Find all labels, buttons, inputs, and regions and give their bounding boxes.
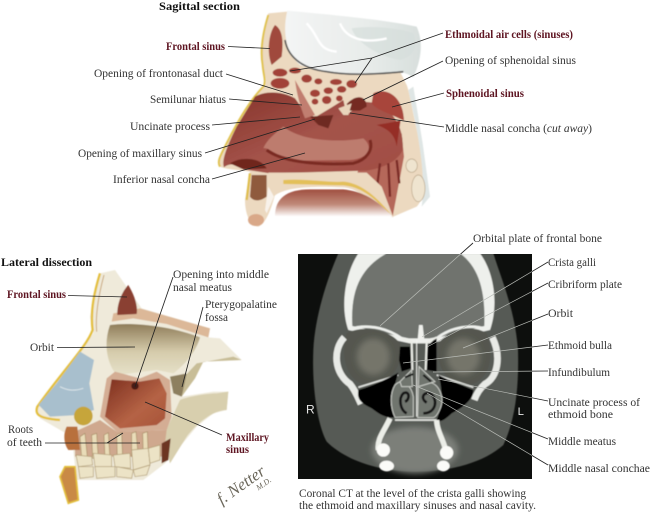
CT label: uncinate process of ethmoid bone: ethmoid bone: [548, 409, 613, 421]
CT label: middle nasal conchae: Middle nasal conchae: [548, 463, 650, 475]
heading: sagittal section: Sagittal section: [159, 1, 241, 13]
leader lines beyond the CT image: [380, 243, 548, 465]
CT label: uncinate process of ethmoid bone: Uncinate process of: [548, 397, 640, 409]
label: pterygopalatine fossa: fossa: [205, 312, 228, 324]
label: sphenoidal sinus: [392, 88, 524, 107]
heading: lateral dissection: Lateral dissection: [1, 257, 93, 269]
label: frontal sinus, sagittal: [166, 41, 270, 53]
label: opening of sphenoidal sinus: Opening of sphenoidal sinus: [445, 55, 577, 67]
CT label: middle meatus: Middle meatus: [548, 436, 617, 448]
label: pterygopalatine fossa: [182, 299, 277, 387]
CT label: cribriform plate: Cribriform plate: [548, 279, 622, 291]
label: semilunar hiatus: [150, 94, 302, 106]
label: middle nasal concha: Middle nasal concha (cut away): [445, 123, 592, 135]
L marker: L: [518, 406, 524, 418]
label: roots of teeth: of teeth: [7, 437, 42, 449]
label: uncinate process: [130, 117, 300, 133]
label: opening into middle nasal meatus: Opening into middle: [173, 269, 269, 281]
label: inferior nasal concha: Inferior nasal concha: [113, 174, 210, 186]
label: opening into middle nasal meatus: nasal meatus: [173, 282, 233, 294]
signature: f. Netter: [213, 461, 269, 508]
label: opening of maxillary sinus: Opening of maxillary sinus: [78, 148, 203, 160]
R marker: R: [306, 403, 315, 417]
illustration: lateral dissection of skull: [37, 270, 273, 512]
label: opening into middle nasal meatus: [135, 269, 269, 387]
caption: CT description: Coronal CT at the level of the crista galli showing: [299, 488, 526, 500]
label: frontal sinus, lateral: Frontal sinus: [7, 289, 66, 301]
label: maxillary sinus: Maxillary: [226, 432, 269, 444]
label: middle nasal concha: [350, 113, 592, 135]
signature: M.D.: [254, 476, 273, 493]
label: sphenoidal sinus: Sphenoidal sinus: [446, 88, 524, 100]
label: semilunar hiatus: Semilunar hiatus: [150, 94, 227, 106]
caption: CT description: [299, 488, 536, 512]
label: roots of teeth: [7, 424, 140, 449]
label: frontal sinus, lateral: [7, 289, 127, 301]
CT label: orbital plate of frontal bone: Orbital plate of frontal bone: [473, 233, 602, 245]
CT label: ethmoid bulla: Ethmoid bulla: [548, 340, 612, 352]
CT label: crista galli: Crista galli: [548, 257, 596, 269]
label: roots of teeth: Roots: [8, 424, 33, 436]
illustration: sagittal section of nasal cavity: [219, 11, 430, 227]
label: maxillary sinus: sinus: [226, 444, 249, 456]
label: inferior nasal concha: [113, 153, 305, 186]
label: opening of sphenoidal sinus: [363, 55, 577, 100]
caption: CT description: the ethmoid and maxillary sinuses and nasal cavity.: [299, 500, 536, 512]
label: frontal sinus, sagittal: Frontal sinus: [166, 41, 225, 53]
label: ethmoidal air cells: [290, 29, 573, 83]
label: maxillary sinus: [145, 402, 269, 456]
CT label: uncinate process of ethmoid bone: [548, 397, 640, 421]
CT label: infundibulum: Infundibulum: [548, 367, 610, 379]
label: pterygopalatine fossa: Pterygopalatine: [205, 299, 277, 311]
label: opening of frontonasal duct: Opening of frontonasal duct: [94, 68, 224, 80]
label: orbit, lateral: Orbit: [30, 342, 55, 354]
label: opening of frontonasal duct: [94, 68, 293, 95]
label: opening of maxillary sinus: [78, 119, 315, 160]
label: uncinate process: Uncinate process: [130, 121, 211, 133]
CT label: orbit: Orbit: [548, 308, 574, 320]
CT scan: coronal section: [298, 254, 532, 479]
label: ethmoidal air cells: Ethmoidal air cells (sinuses): [445, 29, 573, 41]
label: orbit, lateral: [30, 342, 135, 354]
